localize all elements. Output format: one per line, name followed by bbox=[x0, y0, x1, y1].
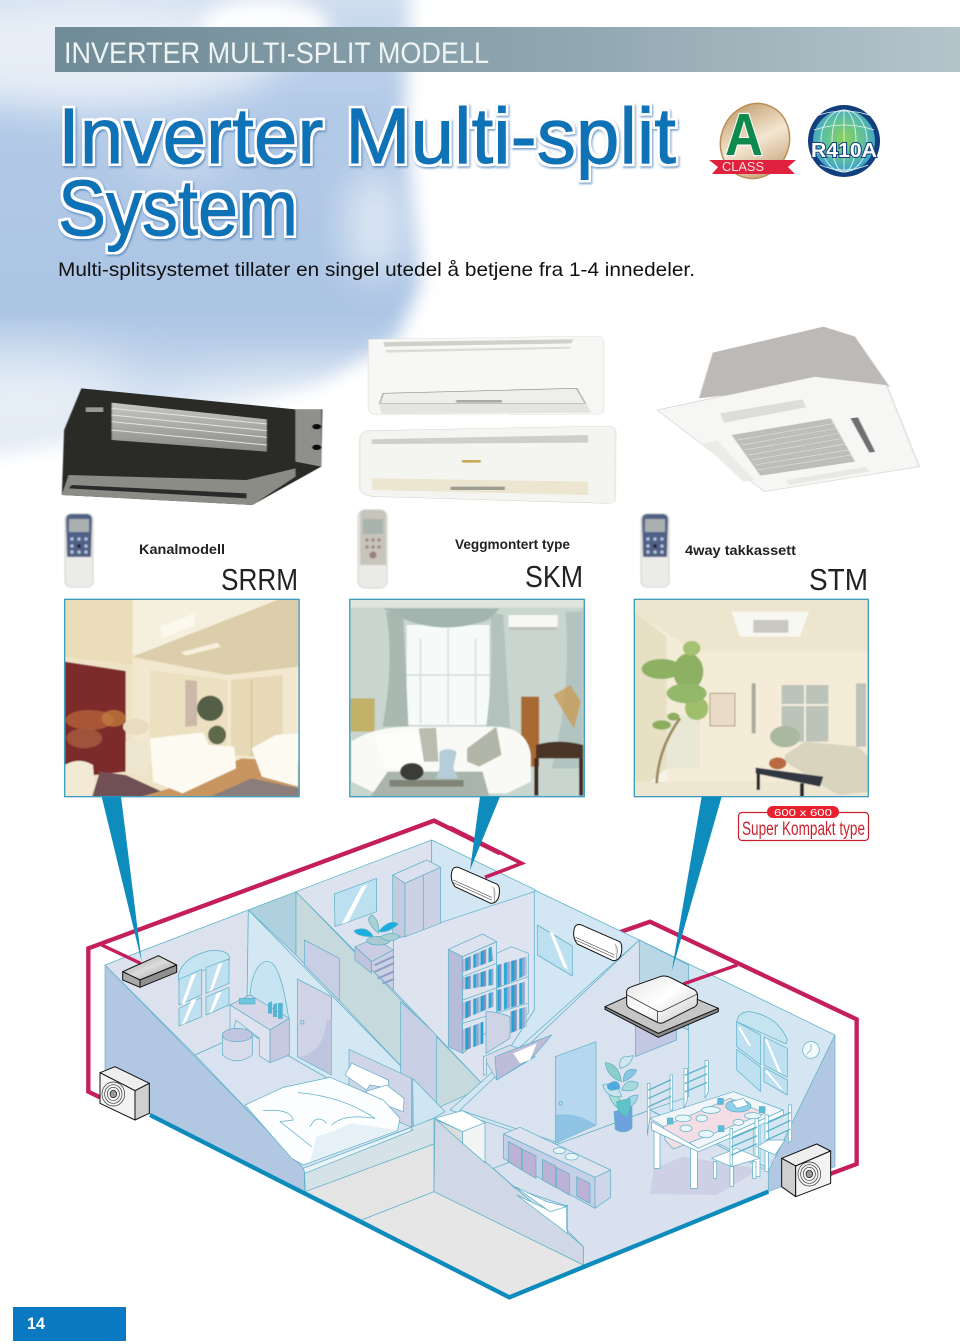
dining table bbox=[650, 1092, 787, 1195]
upper wall unit bbox=[368, 336, 604, 415]
wardrobe bbox=[393, 860, 441, 938]
floor outline in blue bbox=[150, 1115, 768, 1297]
dresser mirror and table bbox=[222, 961, 289, 1063]
badge: super kompakt type bbox=[738, 806, 868, 840]
exterior wall: right bbox=[768, 1035, 835, 1192]
dining room door bbox=[555, 1042, 596, 1143]
page number bbox=[13, 1307, 126, 1341]
bedroom furniture bbox=[178, 950, 413, 1173]
partition walls bbox=[248, 892, 485, 1127]
middle room mirror bbox=[537, 925, 572, 976]
upper room furniture bbox=[334, 860, 441, 990]
product: wall units bbox=[360, 336, 616, 503]
subtitle: Multi-splitsystemet tillater en singel utedel å betjene fra 1-4 innedeler. bbox=[58, 259, 695, 281]
badge: super kompakt type: 600 x 600 bbox=[774, 807, 832, 819]
lower left corridor bbox=[304, 1111, 583, 1297]
indoor unit: duct bbox=[123, 956, 177, 987]
upper room walls bbox=[296, 840, 639, 1087]
model labels: 4way takkassett bbox=[685, 542, 796, 558]
chest and plant bbox=[354, 915, 400, 990]
bedroom walls bbox=[105, 910, 413, 1168]
photo: duct model room bbox=[65, 599, 299, 797]
product: duct unit bbox=[62, 388, 322, 505]
model labels: SKM bbox=[525, 559, 583, 594]
remote control: SKM bbox=[358, 510, 387, 588]
potted plant bbox=[603, 1056, 638, 1132]
title: System bbox=[58, 163, 298, 252]
remote control: SRRM bbox=[65, 514, 93, 587]
indoor unit: wall mounted upper bbox=[451, 867, 499, 903]
product: ceiling cassette bbox=[657, 327, 919, 492]
model labels: SRRM bbox=[221, 562, 298, 597]
beam: duct model bbox=[102, 797, 142, 962]
refrigerant pipe: right circuit bbox=[610, 922, 857, 1174]
pipe branch: left duct unit bbox=[102, 945, 141, 963]
bedroom door bbox=[297, 979, 332, 1075]
bottom cutaway ledge bbox=[493, 1168, 583, 1265]
pipe branch: upper wall unit bbox=[450, 827, 522, 877]
bookshelves bbox=[448, 934, 528, 1053]
model labels: STM bbox=[809, 562, 868, 597]
page number: 14 bbox=[27, 1314, 46, 1333]
badge: super kompakt type: Super Kompakt type bbox=[742, 819, 865, 840]
bedroom window bbox=[178, 950, 229, 1026]
sideboard bbox=[503, 1127, 611, 1208]
wall clock bbox=[803, 1042, 819, 1058]
lower wall unit bbox=[360, 426, 616, 503]
title: Inverter Multi-split bbox=[58, 91, 676, 180]
model labels: Kanalmodell bbox=[139, 541, 225, 557]
remote control: STM bbox=[641, 514, 669, 587]
main dining room walls bbox=[450, 940, 835, 1265]
dining room furniture bbox=[493, 1012, 819, 1265]
badge: A class: CLASS bbox=[722, 159, 764, 174]
exterior wall: left bbox=[105, 965, 304, 1193]
dining room window bbox=[737, 1012, 787, 1095]
indoor unit: wall mounted lower bbox=[574, 924, 622, 961]
bed bbox=[245, 1049, 413, 1173]
door under cassette bbox=[635, 1020, 677, 1057]
house floor plan base bbox=[105, 840, 835, 1297]
pipe branch: cassette unit bbox=[683, 965, 737, 984]
dining chairs bbox=[647, 1061, 792, 1187]
indoor unit: ceiling cassette bbox=[605, 976, 718, 1037]
badge: R410A globe: R410A bbox=[811, 140, 877, 162]
upper room mirror bbox=[334, 878, 377, 927]
header bar bbox=[55, 27, 960, 72]
badge: A class: A bbox=[725, 102, 763, 168]
model labels bbox=[139, 536, 868, 597]
outdoor unit: left bbox=[100, 1067, 149, 1120]
badge: A class bbox=[709, 93, 801, 189]
model labels: Veggmontert type bbox=[455, 536, 570, 552]
beam: wall model bbox=[470, 797, 500, 870]
desk and chair bbox=[483, 1012, 552, 1080]
beam: cassette model bbox=[672, 797, 722, 972]
photo: wall-mounted model room bbox=[350, 599, 584, 797]
header bar: INVERTER MULTI-SPLIT MODELL bbox=[64, 37, 489, 70]
background: sky and clouds bbox=[0, 0, 480, 475]
outdoor unit: right bbox=[782, 1144, 831, 1197]
middle room furniture bbox=[448, 925, 572, 1080]
refrigerant pipe: left circuit bbox=[88, 821, 500, 1097]
house cutaway illustration bbox=[88, 797, 857, 1297]
photo: ceiling cassette room bbox=[634, 599, 868, 797]
title bbox=[58, 91, 676, 252]
badge: R410A globe bbox=[808, 105, 880, 177]
